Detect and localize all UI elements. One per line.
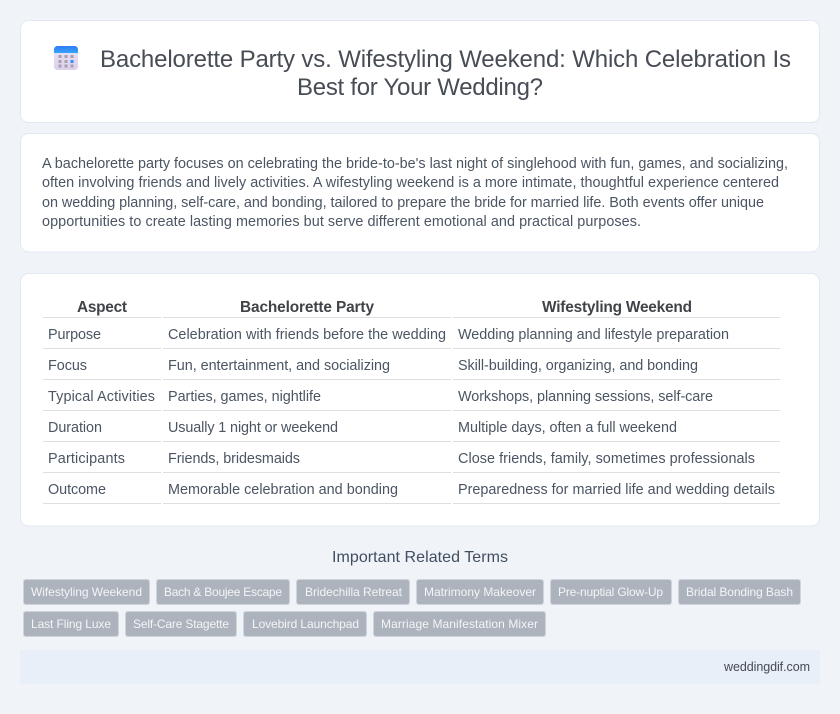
table row: participants xyxy=(48,451,755,467)
tag xyxy=(156,580,290,604)
title xyxy=(100,46,791,101)
tag xyxy=(24,612,118,636)
panel: comparison table xyxy=(20,274,820,526)
title: Bachelorette Party vs. Wifestyling Weekend: Which Celebration Is xyxy=(100,46,791,73)
tag: Bridal Bonding Bash xyxy=(686,585,793,599)
table row: focus: Skill-building, organizing, and bonding xyxy=(458,358,698,374)
panel: title header xyxy=(20,20,820,122)
tag xyxy=(244,612,366,636)
icon: calendar xyxy=(54,46,78,70)
table row: typical activities: Workshops, planning sessions, self-care xyxy=(458,389,713,405)
table header: Bachelorette Party xyxy=(240,299,374,316)
tag: Last Fling Luxe xyxy=(31,617,111,631)
heading: important related terms: Important Related Terms xyxy=(332,549,508,566)
table row: purpose: Celebration with friends before the wedding xyxy=(168,327,446,343)
text block: introduction paragraph: on wedding planning, self-care, and bonding, tailored to prepare the bride for married life. Both events offer unique xyxy=(42,195,764,211)
tag: Bach & Boujee Escape xyxy=(164,585,282,599)
table row: participants: Participants xyxy=(48,451,125,467)
table row: purpose: Wedding planning and lifestyle preparation xyxy=(458,327,729,343)
panel: introduction xyxy=(20,134,820,252)
tag xyxy=(24,580,150,604)
table row: duration xyxy=(48,420,677,436)
tag: Wifestyling Weekend xyxy=(31,585,142,599)
table row: outcome: Memorable celebration and bonding xyxy=(168,482,398,498)
text block: introduction paragraph: often involving friends and lively activities. A wifestyling weekend is a more intimate, thoughtful experience centered xyxy=(42,175,779,191)
table row: purpose: Purpose xyxy=(48,327,101,343)
tag xyxy=(374,612,546,636)
table row: outcome: Preparedness for married life and wedding details xyxy=(458,482,775,498)
table row: participants: Friends, bridesmaids xyxy=(168,451,300,467)
table row: focus: Focus xyxy=(48,358,87,374)
text block: introduction paragraph: A bachelorette party focuses on celebrating the bride-to-be's last night of singlehood with fun, games, and socializing, xyxy=(42,156,788,172)
table row: typical activities: Typical Activities xyxy=(48,389,155,405)
tag xyxy=(416,580,544,604)
table row: duration: Multiple days, often a full weekend xyxy=(458,420,677,436)
footer: weddingdif.com xyxy=(723,660,810,674)
table row: purpose xyxy=(48,327,729,343)
table row: outcome: Outcome xyxy=(48,482,106,498)
tag: Marriage Manifestation Mixer xyxy=(381,617,538,631)
table row: outcome xyxy=(48,482,775,498)
table header: Wifestyling Weekend xyxy=(542,299,692,316)
table row: participants: Close friends, family, sometimes professionals xyxy=(458,451,755,467)
tag: Matrimony Makeover xyxy=(424,585,536,599)
tag xyxy=(296,580,410,604)
table row: duration: Duration xyxy=(48,420,102,436)
tag xyxy=(126,612,236,636)
tag: Self-Care Stagette xyxy=(133,617,229,631)
text block: introduction paragraph xyxy=(42,156,788,230)
table row: focus: Fun, entertainment, and socializing xyxy=(168,358,390,374)
table row: focus xyxy=(48,358,698,374)
table row: duration: Usually 1 night or weekend xyxy=(168,420,338,436)
text block: introduction paragraph: opportunities to create lasting memories but serve different emotional and practical purposes. xyxy=(42,214,641,230)
tag xyxy=(678,580,800,604)
table header xyxy=(77,299,692,316)
tag: Pre-nuptial Glow-Up xyxy=(558,585,663,599)
tag: Lovebird Launchpad xyxy=(252,617,359,631)
title: Best for Your Wedding? xyxy=(297,74,543,101)
tag: Bridechilla Retreat xyxy=(305,585,403,599)
table header: Aspect xyxy=(77,299,127,316)
table row: typical activities: Parties, games, nightlife xyxy=(168,389,321,405)
table row: typical activities xyxy=(48,389,713,405)
tag list: related terms xyxy=(24,580,800,636)
footer xyxy=(20,650,820,684)
tag xyxy=(550,580,672,604)
